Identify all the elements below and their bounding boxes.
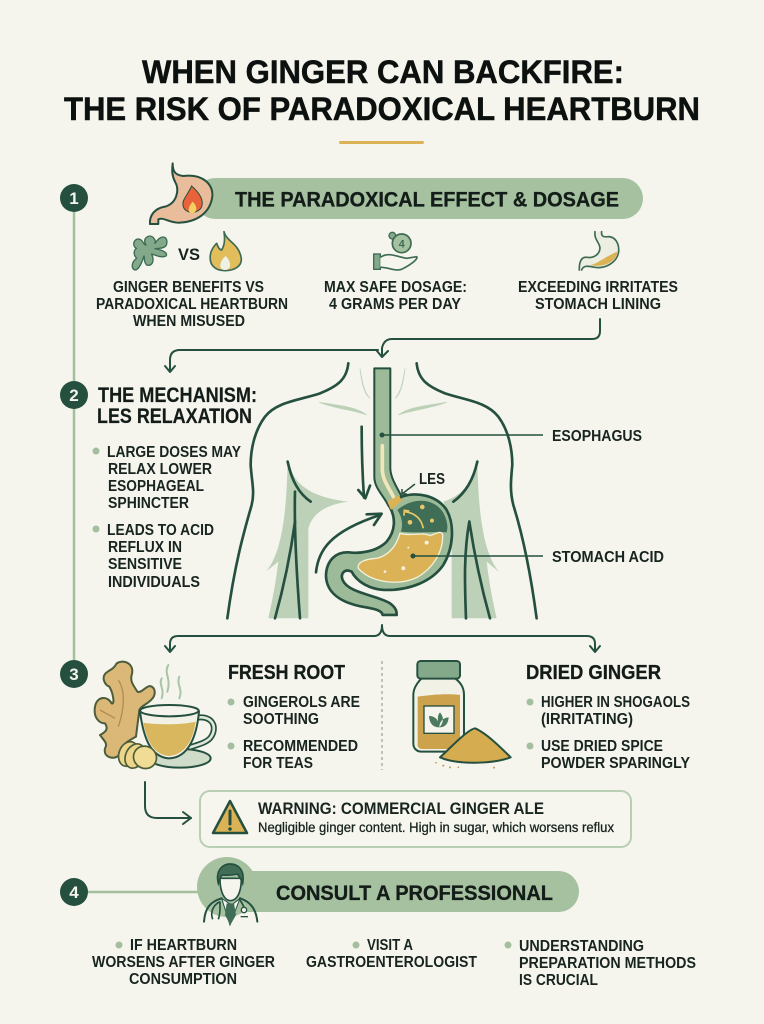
section 4 header: [197, 857, 579, 925]
section 1 header: THE PARADOXICAL EFFECT & DOSAGE: [235, 188, 619, 212]
section 2 heading: THE MECHANISM:: [98, 384, 257, 407]
text: preparation methods: UNDERSTANDING: [519, 938, 644, 955]
text: if heartburn worsens: IF HEARTBURN: [130, 937, 237, 954]
warning callout: Negligible ginger content. High in sugar, which worsens reflux: [258, 819, 614, 835]
steam: [161, 665, 181, 698]
icon: ginger vs flame: VS: [178, 245, 200, 264]
bracket arrow: section 2 to 3: [165, 625, 600, 652]
esophagus: [374, 368, 402, 506]
text: max dosage: [324, 279, 467, 313]
step 3 number: [60, 660, 88, 688]
text: ginger benefits: [96, 279, 288, 330]
anatomy diagram: torso, esophagus and stomach: [227, 363, 537, 618]
text: preparation methods: IS CRUCIAL: [519, 972, 598, 989]
warning callout: [200, 791, 631, 847]
title underline: [339, 141, 424, 144]
bullet: shogaols: (IRRITATING): [541, 711, 633, 728]
text: ginger benefits: GINGER BENEFITS VS: [113, 279, 264, 296]
text: if heartburn worsens: [92, 937, 275, 988]
bullet: acid reflux: LEADS TO ACID: [107, 522, 214, 539]
bullet: acid reflux: INDIVIDUALS: [108, 574, 200, 591]
text: exceeding: STOMACH LINING: [535, 296, 661, 313]
icon: ginger vs flame: [132, 232, 241, 271]
bullet: large doses: ESOPHAGEAL: [108, 478, 204, 495]
heading: fresh root: FRESH ROOT: [228, 662, 345, 684]
text: visit specialist: GASTROENTEROLOGIST: [306, 954, 477, 971]
bullet: shogaols: HIGHER IN SHOGAOLS: [541, 694, 690, 711]
text: if heartburn worsens: CONSUMPTION: [129, 971, 237, 988]
lid: [417, 661, 460, 679]
icon: ginger root: [132, 236, 167, 270]
arrow to warning: [145, 782, 191, 824]
step 2 number: 2: [69, 386, 79, 405]
icon: warning triangle: [213, 801, 247, 833]
section 2 heading: LES RELAXATION: [97, 405, 252, 428]
bullet: sparingly: [526, 738, 690, 772]
illustration: ginger root and tea: [95, 662, 214, 773]
warning callout: WARNING: COMMERCIAL GINGER ALE: [258, 799, 544, 818]
text: visit specialist: VISIT A: [367, 937, 413, 954]
text: max dosage: 4 GRAMS PER DAY: [329, 296, 461, 313]
bullet: gingerols: [228, 694, 360, 728]
section 4 header: CONSULT A PROFESSIONAL: [276, 882, 553, 905]
bullet: acid reflux: REFLUX IN: [108, 539, 182, 556]
label: [424, 706, 454, 733]
icon: doctor: [204, 864, 257, 925]
title: [64, 54, 700, 127]
bullet: gingerols: GINGEROLS ARE: [243, 694, 360, 711]
text: ginger benefits: PARADOXICAL HEARTBURN: [96, 296, 288, 313]
bullet: sparingly: USE DRIED SPICE: [541, 738, 663, 755]
text: preparation methods: PREPARATION METHODS: [519, 955, 696, 972]
icon: stomach with acid: [579, 232, 619, 270]
callout: stomach acid: [410, 549, 664, 566]
text: visit specialist: [306, 937, 477, 971]
illustration: jar and powder: [413, 661, 511, 769]
ginger root: [95, 662, 155, 758]
ginger slices: [115, 739, 141, 769]
icon: stomach with flame: [150, 163, 212, 224]
powder pile: [440, 728, 511, 763]
stomach: [326, 494, 452, 615]
bullet: large doses: LARGE DOSES MAY: [107, 444, 241, 461]
step 2 number: [60, 381, 88, 409]
bullet: teas: RECOMMENDED: [243, 738, 358, 755]
title: WHEN GINGER CAN BACKFIRE:: [142, 54, 624, 90]
callout: stomach acid: STOMACH ACID: [552, 549, 664, 566]
bullet: sparingly: POWDER SPARINGLY: [541, 755, 690, 772]
step 3 number: 3: [69, 665, 79, 684]
text: preparation methods: [504, 938, 696, 989]
callout: LES: LES: [419, 471, 445, 488]
text: exceeding: EXCEEDING IRRITATES: [518, 279, 678, 296]
bullet: acid reflux: [92, 522, 214, 591]
cup: [190, 717, 214, 747]
section 2 heading: [97, 384, 257, 428]
step 1 number: 1: [69, 189, 79, 208]
text: ginger benefits: WHEN MISUSED: [133, 313, 245, 330]
step 4 number: 4: [69, 883, 79, 902]
callout: esophagus: [380, 428, 642, 445]
callout: LES: [402, 471, 445, 494]
step 4 number: [60, 878, 88, 906]
bullet: teas: FOR TEAS: [243, 755, 313, 772]
bullet: large doses: SPHINCTER: [108, 495, 189, 512]
bullet: teas: [228, 738, 358, 772]
title: THE RISK OF PARADOXICAL HEARTBURN: [64, 91, 700, 127]
jar: [413, 678, 464, 752]
text: max dosage: MAX SAFE DOSAGE:: [324, 279, 467, 296]
connector arrow: section 1 to 2: [165, 319, 600, 372]
bullet: acid reflux: SENSITIVE: [108, 556, 182, 573]
icon: hand with dose: 4: [399, 238, 405, 250]
step 1 number: [60, 184, 88, 212]
section 1 header: [150, 163, 643, 224]
text: if heartburn worsens: WORSENS AFTER GINGER: [92, 954, 275, 971]
LES band: [388, 496, 402, 509]
saucer: [149, 749, 211, 768]
reflux arrows: [316, 427, 382, 572]
bullet: gingerols: SOOTHING: [243, 711, 319, 728]
bullet: large doses: [92, 444, 241, 512]
stomach gas area: [397, 501, 447, 532]
bullet: shogaols: [526, 694, 690, 728]
chest shading: [266, 368, 499, 618]
icon: hand with dose: [374, 232, 417, 270]
heading: dried ginger: DRIED GINGER: [526, 662, 662, 684]
stomach acid: [358, 532, 443, 582]
callout: esophagus: ESOPHAGUS: [552, 428, 642, 445]
torso outline: [227, 363, 537, 618]
text: exceeding: [518, 279, 678, 313]
icon: gold flame: [210, 232, 241, 271]
bullet: large doses: RELAX LOWER: [108, 461, 212, 478]
